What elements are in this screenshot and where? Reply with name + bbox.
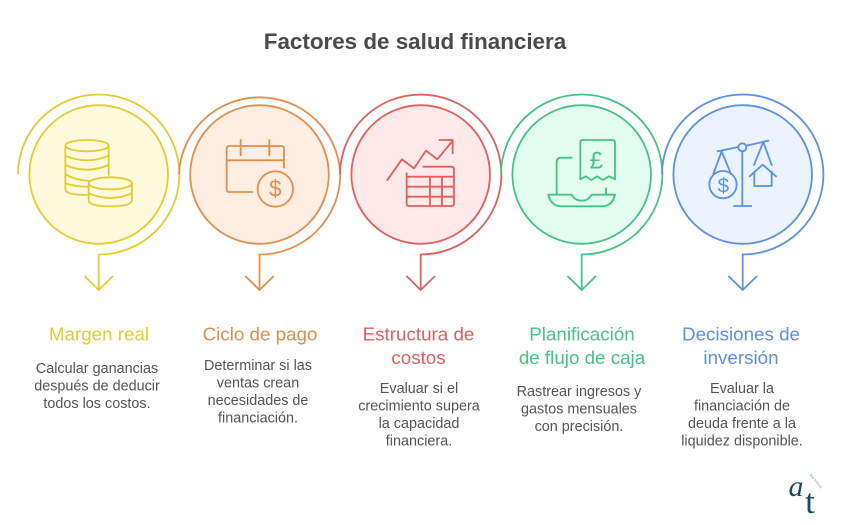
heading: Ciclo de pago: Ciclo de pago xyxy=(203,324,317,344)
panel: Ciclo de pago xyxy=(179,97,340,426)
ring and arrow: Margen real xyxy=(18,95,179,290)
icon: growth chart with table xyxy=(387,140,454,206)
icon: calendar with dollar: $ xyxy=(269,176,282,202)
panel: Decisiones de inversión xyxy=(662,94,823,450)
title: Factores de salud financiera xyxy=(264,29,567,54)
heading: Estructura de costos: costos xyxy=(391,347,446,368)
icon: coins xyxy=(65,140,132,206)
logo xyxy=(788,470,824,521)
icon: laptop with receipt xyxy=(548,140,615,206)
text: Estructura de costos: financiera. xyxy=(386,434,452,450)
logo small text: the letters xyxy=(809,473,824,489)
heading: Planificación de flujo de caja: Planificación xyxy=(529,324,635,344)
text: Decisiones de inversión: Evaluar la xyxy=(710,381,774,397)
text: Margen real: todos los costos. xyxy=(43,396,151,412)
text: Ciclo de pago: Determinar si las xyxy=(204,358,312,374)
text: Ciclo de pago: financiación. xyxy=(218,410,298,426)
icon: calendar with dollar xyxy=(227,140,293,207)
text: Decisiones de inversión: financiación de xyxy=(694,398,790,414)
text: Planificación de flujo de caja: con precisión. xyxy=(535,419,623,435)
ring and arrow: Estructura de costos xyxy=(340,95,501,290)
text: Decisiones de inversión: liquidez disponible. xyxy=(681,434,803,450)
text: Planificación de flujo de caja: gastos mensuales xyxy=(521,402,637,418)
heading: Estructura de costos: Estructura de xyxy=(363,324,474,344)
text: Ciclo de pago: necesidades de xyxy=(208,393,308,409)
logo letter a: a xyxy=(788,470,804,503)
text: Estructura de costos: Evaluar si el xyxy=(380,381,458,397)
text: Estructura de costos: crecimiento supera xyxy=(358,398,480,414)
heading: Margen real: Margen real xyxy=(49,324,149,344)
ring and arrow: Ciclo de pago xyxy=(179,97,340,290)
text: Margen real: después de deducir xyxy=(34,378,160,394)
panel: Planificación de flujo de caja xyxy=(501,94,662,435)
icon: laptop with receipt: £ xyxy=(590,147,603,174)
panel: Margen real xyxy=(18,95,179,412)
icon: balance scale: $ xyxy=(718,174,730,197)
text: Planificación de flujo de caja: Rastrear ingresos y xyxy=(517,384,641,400)
ring and arrow: Planificación de flujo de caja xyxy=(501,94,662,290)
heading: Decisiones de inversión: Decisiones de xyxy=(682,324,800,344)
heading: Decisiones de inversión: inversión xyxy=(703,347,779,368)
heading: Planificación de flujo de caja: de flujo de caja xyxy=(519,347,646,368)
icon: balance scale xyxy=(709,141,776,206)
text: Estructura de costos: la capacidad xyxy=(379,416,459,432)
text: Margen real: Calcular ganancias xyxy=(36,361,158,377)
panel: Estructura de costos xyxy=(340,95,501,450)
text: Ciclo de pago: ventas crean xyxy=(217,376,299,392)
ring and arrow: Decisiones de inversión xyxy=(662,94,823,290)
text: Decisiones de inversión: deuda frente a la xyxy=(688,416,796,432)
logo letter t: t xyxy=(805,482,815,521)
